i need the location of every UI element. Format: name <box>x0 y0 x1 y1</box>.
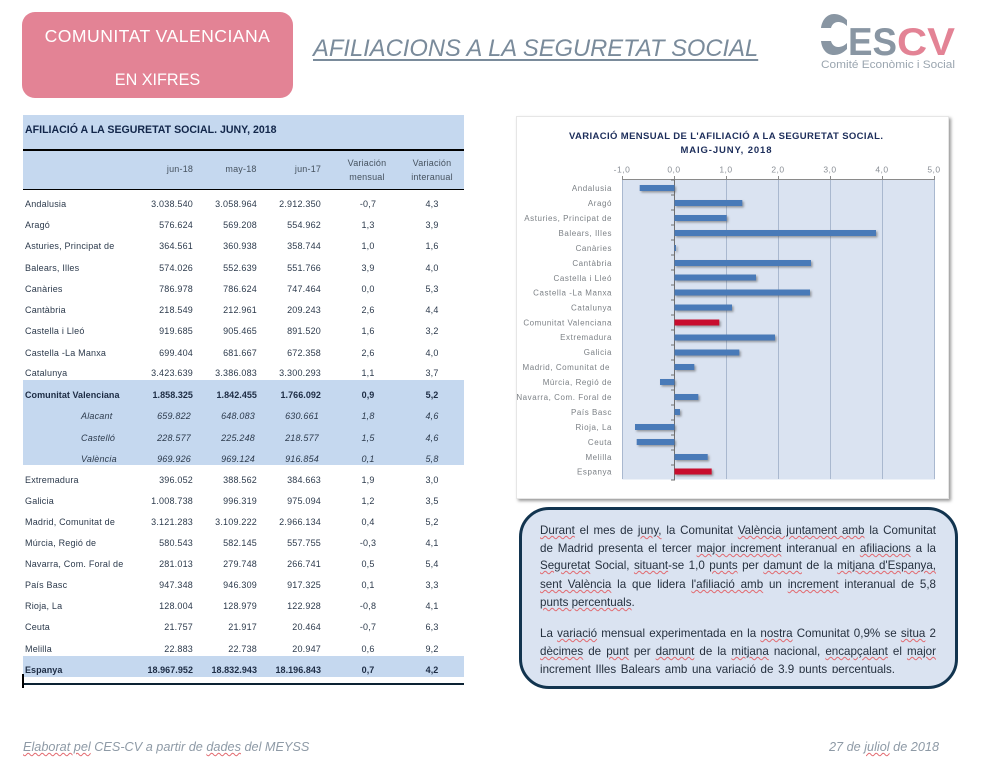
region labels: Andalusia <box>572 184 612 193</box>
row: Andalusia <box>25 199 439 209</box>
logo: CESCV: Comité Econòmic i Social <box>821 59 955 71</box>
row: Rioja <box>25 601 439 611</box>
row: Asturies: 1,6 <box>425 241 439 251</box>
row: Castelló: 225.248 <box>221 433 255 443</box>
table column header: Variación <box>413 158 451 168</box>
row: Navarra: 266.741 <box>287 559 321 569</box>
row: València: 969.926 <box>157 454 191 464</box>
row: Extremadura <box>25 475 439 485</box>
row: Alacant <box>80 411 439 421</box>
row: Castella i Lleó: 891.520 <box>287 326 321 336</box>
row: Cantàbria <box>25 305 439 315</box>
row: Catalunya: 3.386.083 <box>215 368 257 378</box>
row: Andalusia: Andalusia <box>25 199 66 209</box>
row: Asturies: 364.561 <box>159 241 193 251</box>
row: Castelló: 228.577 <box>157 433 191 443</box>
title: AFILIACIONS A LA SEGURETAT SOCIAL <box>313 35 758 62</box>
row: Aragó: 3,9 <box>425 220 439 230</box>
region labels: Castella -La Manxa <box>533 288 612 298</box>
row: València: 916.854 <box>285 454 319 464</box>
row: Canàries: Canàries <box>25 284 63 294</box>
row: Galicia: 1,2 <box>361 496 375 506</box>
row: País Basc: País Basc <box>25 580 67 590</box>
row: Galicia: 1.008.738 <box>151 496 193 506</box>
row: Ceuta: 21.917 <box>228 622 257 632</box>
row: Alacant: 648.083 <box>221 411 255 421</box>
row: Castella i Lleó: 3,2 <box>425 326 439 336</box>
row: València: 0,1 <box>361 454 375 464</box>
callout: commentary <box>519 507 958 689</box>
row: València <box>81 454 439 464</box>
row: Cantàbria: 209.243 <box>287 305 321 315</box>
chart title: VARIACIÓ MENSUAL DE L'AFILIACIÓ A LA SEGURETAT SOCIAL. <box>569 130 883 142</box>
row: Andalusia: 3.058.964 <box>215 199 257 209</box>
row: Múrcia: 580.543 <box>159 538 193 548</box>
row: Melilla: Melilla <box>25 644 52 654</box>
row: Castella i Lleó: 905.465 <box>223 326 257 336</box>
row: Navarra: 5,4 <box>425 559 439 569</box>
region labels: Ceuta <box>588 438 612 447</box>
footer date: 27 de juliol de 2018 <box>829 740 939 754</box>
row: Múrcia: 582.145 <box>223 538 257 548</box>
row: Canàries: 786.978 <box>159 284 193 294</box>
row: Andalusia: 4,3 <box>425 199 439 209</box>
row: Galicia: 996.319 <box>223 496 257 506</box>
axis labels: 4,0 <box>875 164 889 174</box>
axis labels: 2,0 <box>771 164 785 174</box>
row: València: València <box>81 454 117 464</box>
region labels: Rioja, La <box>575 423 612 432</box>
row: Comunitat Valenciana: 1.842.455 <box>216 390 257 400</box>
highlight band: Espanya <box>23 656 464 677</box>
table column header: interanual <box>411 172 453 182</box>
row: Castella i Lleó <box>25 326 439 336</box>
row: Comunitat Valenciana: Comunitat Valenciana <box>25 390 120 400</box>
row: Asturies <box>25 241 439 251</box>
axis labels: 3,0 <box>823 164 837 174</box>
row: Castella-La Manxa: 672.358 <box>287 348 321 358</box>
row: Melilla: 0,6 <box>361 644 375 654</box>
row: Rioja: Rioja, La <box>25 601 62 611</box>
row: Rioja: 128.979 <box>223 601 257 611</box>
row: Espanya: 0,7 <box>362 665 374 675</box>
row: Alacant: 630.661 <box>285 411 319 421</box>
region labels: Balears, Illes <box>558 229 612 238</box>
row: Balears <box>25 263 439 273</box>
chart title <box>569 130 883 156</box>
row: Múrcia: 4,1 <box>425 538 439 548</box>
row: Madrid: 3.109.222 <box>215 517 257 527</box>
region labels: Múrcia, Regió de <box>543 378 612 387</box>
row: Espanya: 18.832.943 <box>211 665 257 675</box>
row: Catalunya: 3.423.639 <box>151 368 193 378</box>
region labels: País Basc <box>571 408 612 417</box>
callout text: La variació mensual experimentada en la nostra Comunitat 0,9% se situa 2 <box>540 627 936 640</box>
row: Rioja: 128.004 <box>159 601 193 611</box>
row: Galicia <box>25 496 439 506</box>
row: Asturies: Asturies, Principat de <box>25 241 114 251</box>
row: Melilla: 22.738 <box>228 644 257 654</box>
row: Melilla: 22.883 <box>164 644 193 654</box>
row: Andalusia: 2.912.350 <box>279 199 321 209</box>
row: Rioja: -0,8 <box>360 601 376 611</box>
row: Castella-La Manxa: Castella -La Manxa <box>25 348 106 358</box>
logo: CESCV: CV <box>897 21 955 64</box>
row: Melilla: 9,2 <box>425 644 439 654</box>
footer source: Elaborat pel CES-CV a partir de dades del MEYSS <box>23 740 309 754</box>
row: Alacant: 659.822 <box>157 411 191 421</box>
row: Comunitat Valenciana: 1.766.092 <box>280 390 321 400</box>
callout text: punts percentuals. <box>540 596 635 609</box>
row: Extremadura: 384.663 <box>287 475 321 485</box>
row: Múrcia <box>25 538 439 548</box>
row: Aragó: 1,3 <box>361 220 375 230</box>
row: Extremadura: Extremadura <box>25 475 79 485</box>
table column header: jun-17 <box>295 164 321 174</box>
row: Alacant: Alacant <box>81 411 112 421</box>
row: Aragó: Aragó <box>25 220 50 230</box>
logo: CESCV: ES <box>848 21 897 64</box>
row: València: 969.124 <box>221 454 255 464</box>
row: Galicia: 975.094 <box>287 496 321 506</box>
row: Cantàbria: Cantàbria <box>25 305 66 315</box>
row: Melilla <box>25 644 439 654</box>
row: Espanya: 18.967.952 <box>147 665 193 675</box>
row: Balears: 552.639 <box>223 263 257 273</box>
table title band: AFILIACIÓ A LA SEGURETAT SOCIAL. JUNY, 2018 <box>25 124 277 136</box>
row: Castella-La Manxa <box>25 348 439 358</box>
row: Canàries: 0,0 <box>361 284 375 294</box>
row: Castella-La Manxa: 681.667 <box>223 348 257 358</box>
row: Castelló: 4,6 <box>425 433 439 443</box>
row: Balears: 551.766 <box>287 263 321 273</box>
region labels: Galicia <box>584 348 612 357</box>
region labels: Asturies, Principat de <box>524 214 612 223</box>
row: Castella-La Manxa: 4,0 <box>425 348 439 358</box>
row: Extremadura: 3,0 <box>425 475 439 485</box>
row: Melilla: 20.947 <box>292 644 321 654</box>
region labels: Navarra, Com. Foral de <box>516 393 612 402</box>
row: Cantàbria: 218.549 <box>159 305 193 315</box>
row: Extremadura: 388.562 <box>223 475 257 485</box>
callout text: de Madrid presenta el tercer major increment interanual en afiliacions a la <box>540 542 936 555</box>
header badge: Comunitat Valenciana en xifres: COMUNITAT VALENCIANA <box>45 26 270 46</box>
row: Cantàbria: 2,6 <box>361 305 375 315</box>
region labels: Extremadura <box>560 333 612 342</box>
row: Balears: 3,9 <box>361 263 375 273</box>
callout text: Seguretat Social, situant-se 1,0 punts per damunt de la mitjana d'Espanya, <box>540 559 936 572</box>
row: Comunitat Valenciana: 1.858.325 <box>152 390 193 400</box>
row: Castella i Lleó: 1,6 <box>361 326 375 336</box>
row: València: 5,8 <box>425 454 439 464</box>
axis labels: -1,0 <box>614 164 630 174</box>
row: Madrid: 3.121.283 <box>151 517 193 527</box>
row: Aragó: 576.624 <box>159 220 193 230</box>
region labels: Canàries <box>576 244 612 253</box>
row: Castelló: 218.577 <box>285 433 319 443</box>
row: Navarra: Navarra, Com. Foral de <box>25 559 123 569</box>
row: Extremadura: 396.052 <box>159 475 193 485</box>
row: Alacant: 4,6 <box>425 411 439 421</box>
row: Múrcia: -0,3 <box>360 538 376 548</box>
row: Comunitat Valenciana: 0,9 <box>362 390 374 400</box>
row: Catalunya: 3,7 <box>425 368 439 378</box>
row: Comunitat Valenciana: 5,2 <box>426 390 438 400</box>
axis labels: 0,0 <box>667 164 681 174</box>
row: Ceuta: 6,3 <box>425 622 439 632</box>
row: Canàries: 786.624 <box>223 284 257 294</box>
row: País Basc: 3,3 <box>425 580 439 590</box>
highlight band: Comunitat Valenciana <box>23 380 464 465</box>
region labels: Melilla <box>585 453 612 462</box>
axis labels: 1,0 <box>719 164 733 174</box>
row: Madrid: Madrid, Comunitat de <box>25 517 115 527</box>
row: País Basc <box>25 580 439 590</box>
row: Navarra: 0,5 <box>361 559 375 569</box>
row: Castella-La Manxa: 699.404 <box>159 348 193 358</box>
row: Madrid: 0,4 <box>361 517 375 527</box>
row: Balears: 574.026 <box>159 263 193 273</box>
row: Navarra <box>25 559 439 569</box>
row: Canàries <box>25 284 439 294</box>
row: Espanya: 4,2 <box>426 665 438 675</box>
row: Cantàbria: 4,4 <box>425 305 439 315</box>
row: Espanya: 18.196.843 <box>275 665 321 675</box>
row: País Basc: 947.348 <box>159 580 193 590</box>
row: Extremadura: 1,9 <box>361 475 375 485</box>
row: Ceuta: 20.464 <box>292 622 321 632</box>
row: Castella i Lleó: Castella i Lleó <box>25 326 85 336</box>
row: Navarra: 281.013 <box>159 559 193 569</box>
callout text: dècimes de punt per damunt de la mitjana nacional, encapçalant el major <box>540 645 936 658</box>
axis labels <box>614 164 941 174</box>
table column header: may-18 <box>225 164 257 174</box>
row: Canàries: 5,3 <box>425 284 439 294</box>
row: Catalunya: 1,1 <box>361 368 375 378</box>
row: País Basc: 917.325 <box>287 580 321 590</box>
row: Castelló: 1,5 <box>361 433 375 443</box>
row: Galicia: 3,5 <box>425 496 439 506</box>
row: Aragó: 569.208 <box>223 220 257 230</box>
row: Aragó: 554.962 <box>287 220 321 230</box>
bars <box>635 185 876 474</box>
table column header: jun-18 <box>167 164 193 174</box>
row: Catalunya: 3.300.293 <box>279 368 321 378</box>
row: Andalusia: -0,7 <box>360 199 376 209</box>
row: Andalusia: 3.038.540 <box>151 199 193 209</box>
region labels: Aragó <box>588 199 612 208</box>
row: Catalunya: Catalunya <box>25 368 67 378</box>
row: Catalunya <box>25 368 439 378</box>
row: Rioja: 4,1 <box>425 601 439 611</box>
row: Castelló <box>81 433 439 443</box>
header badge: Comunitat Valenciana en xifres: EN XIFRES <box>115 71 200 89</box>
region labels: Catalunya <box>571 304 612 312</box>
row: Ceuta: -0,7 <box>360 622 376 632</box>
row: Aragó <box>25 220 439 230</box>
row: Múrcia: Múrcia, Regió de <box>25 538 96 548</box>
row: País Basc: 0,1 <box>361 580 375 590</box>
data table <box>22 115 464 688</box>
row: Navarra: 279.748 <box>223 559 257 569</box>
region labels: Castella i Lleó <box>554 274 612 283</box>
row: Castelló: Castelló <box>81 433 115 443</box>
row: Cantàbria: 212.961 <box>223 305 257 315</box>
table title band <box>23 115 464 149</box>
axis labels: 5,0 <box>927 164 941 174</box>
row: Comunitat Valenciana <box>25 390 438 400</box>
region labels: Cantàbria <box>572 259 612 268</box>
row: Asturies: 360.938 <box>223 241 257 251</box>
row: Balears: Balears, Illes <box>25 263 79 273</box>
table column header: Variación <box>348 158 386 168</box>
logo: CESCV <box>821 14 955 71</box>
row: Madrid: 2.966.134 <box>279 517 321 527</box>
row: Madrid: 5,2 <box>425 517 439 527</box>
row: Madrid <box>25 517 439 527</box>
row: País Basc: 946.309 <box>223 580 257 590</box>
panel: bar chart card <box>516 116 949 499</box>
row: Asturies: 358.744 <box>287 241 321 251</box>
row: Espanya <box>25 665 438 675</box>
row: Castella i Lleó: 919.685 <box>159 326 193 336</box>
row: Canàries: 747.464 <box>287 284 321 294</box>
row: Ceuta: 21.757 <box>164 622 193 632</box>
region labels: Comunitat Valenciana <box>523 318 612 328</box>
region labels: Madrid, Comunitat de <box>523 363 610 372</box>
row: Castella-La Manxa: 2,6 <box>361 348 375 358</box>
table column header: mensual <box>349 172 385 182</box>
row: Ceuta <box>25 622 439 632</box>
row: Rioja: 122.928 <box>287 601 321 611</box>
region labels <box>516 184 612 476</box>
callout text: Durant el mes de juny, la Comunitat València juntament amb la Comunitat <box>540 524 936 537</box>
row: Ceuta: Ceuta <box>25 622 50 632</box>
row: Asturies: 1,0 <box>361 241 375 251</box>
row: Galicia: Galicia <box>25 496 54 506</box>
row: Balears: 4,0 <box>425 263 439 273</box>
header badge: Comunitat Valenciana en xifres <box>22 12 293 98</box>
row: Alacant: 1,8 <box>361 411 375 421</box>
row: Espanya: Espanya <box>25 665 62 675</box>
chart title: MAIG-JUNY, 2018 <box>680 145 772 156</box>
table column header <box>23 149 464 190</box>
row: Múrcia: 557.755 <box>287 538 321 548</box>
region labels: Espanya <box>577 468 612 476</box>
callout text: sent València la que lidera l'afiliació amb un increment interanual de 5,8 <box>540 578 936 591</box>
